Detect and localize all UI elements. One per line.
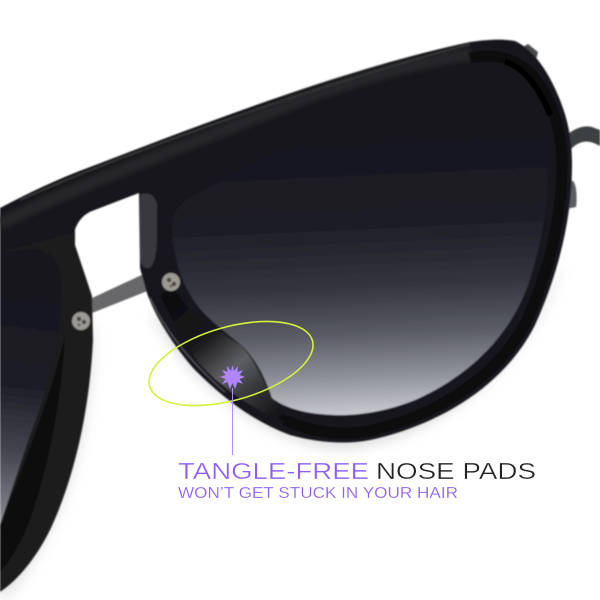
left frame <box>0 212 93 592</box>
outer edge line <box>150 298 225 392</box>
callout ellipse <box>140 305 322 422</box>
left frame dark band <box>0 335 65 572</box>
heading <box>178 458 536 484</box>
nose pad <box>140 193 157 268</box>
main lens <box>172 76 548 415</box>
screw: left <box>72 312 90 330</box>
heading: NOSE PADS <box>376 458 536 484</box>
temple arm <box>568 126 600 150</box>
soft shadow under frames <box>0 260 565 600</box>
callout leader line <box>232 388 234 455</box>
hinge stud <box>561 180 577 209</box>
bridge bar <box>90 272 150 313</box>
icon: starburst marker <box>220 365 245 389</box>
rim highlight <box>505 62 550 115</box>
lower nose frame shading <box>160 285 292 424</box>
top edge highlight <box>20 44 470 200</box>
main frame with bridge <box>0 40 572 442</box>
heading: TANGLE-FREE <box>178 458 369 484</box>
left lens <box>0 249 62 525</box>
glossy rim <box>285 56 562 433</box>
screw: right <box>162 273 180 291</box>
top stud <box>521 44 538 64</box>
upper frame sheen <box>0 54 470 224</box>
subheading: WON’T GET STUCK IN YOUR HAIR <box>178 485 458 502</box>
